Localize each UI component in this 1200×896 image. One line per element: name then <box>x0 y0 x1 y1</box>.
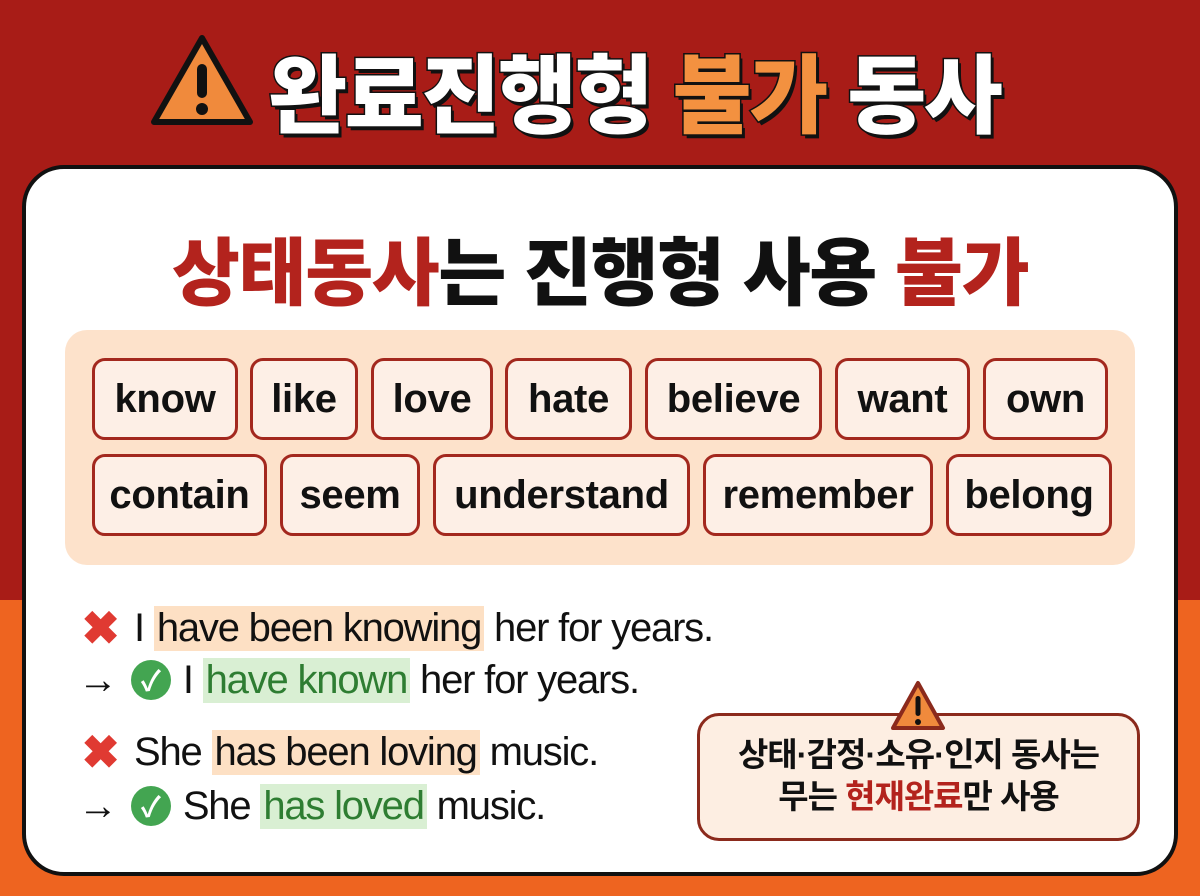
panel: stative verb chips <box>65 330 1135 565</box>
title text: 완료진행형 불가 동사 <box>268 49 1000 145</box>
panel: stative verb chips: like <box>271 376 337 420</box>
title <box>151 35 1004 145</box>
panel: stative verb chips: understand <box>454 472 669 516</box>
sentence 1 wrong: ✖ <box>81 602 119 654</box>
icon: warning triangle <box>151 35 253 125</box>
sentence 2 correct: ✓ <box>141 792 161 823</box>
main card <box>22 165 1178 876</box>
chip row 2: contain <box>109 472 250 516</box>
icon: callout warning triangle <box>891 680 946 730</box>
panel: stative verb chips: want <box>858 376 947 420</box>
sentence 1 correct: ✓ <box>141 666 161 697</box>
panel: stative verb chips: own <box>1006 376 1085 420</box>
chip row 1 <box>92 358 238 440</box>
sentence 1 wrong: I her for years. <box>134 606 713 650</box>
background top red band <box>0 0 1200 600</box>
sentence 2 wrong: She music. <box>134 730 598 774</box>
panel: stative verb chips: seem <box>299 472 401 516</box>
sentence 2 wrong: ✖ <box>81 726 119 778</box>
sentence 2 wrong: has been loving <box>214 730 477 774</box>
panel: stative verb chips: belong <box>964 472 1094 516</box>
callout: 상태·감정·소유·인지 동사는 <box>738 736 1099 773</box>
panel: stative verb chips: love <box>393 376 471 420</box>
sentence 1 correct: → I her for years. <box>78 658 639 702</box>
sentence 1 wrong: have been knowing <box>157 606 481 650</box>
callout <box>697 713 1140 841</box>
panel: stative verb chips: remember <box>722 472 914 516</box>
chip row 2 <box>92 454 267 536</box>
subtitle: 상태동사는 진행형 사용 불가 <box>172 232 1028 315</box>
sentence 2 correct: has loved <box>263 784 424 828</box>
chip row 1: know <box>114 376 216 420</box>
panel: stative verb chips: hate <box>528 376 609 420</box>
callout: 무는 현재완료만 사용 <box>778 778 1059 815</box>
sentence 1 correct: have known <box>206 658 407 702</box>
sentence 2 correct: → She music. <box>78 784 545 828</box>
panel: stative verb chips: believe <box>667 376 800 420</box>
